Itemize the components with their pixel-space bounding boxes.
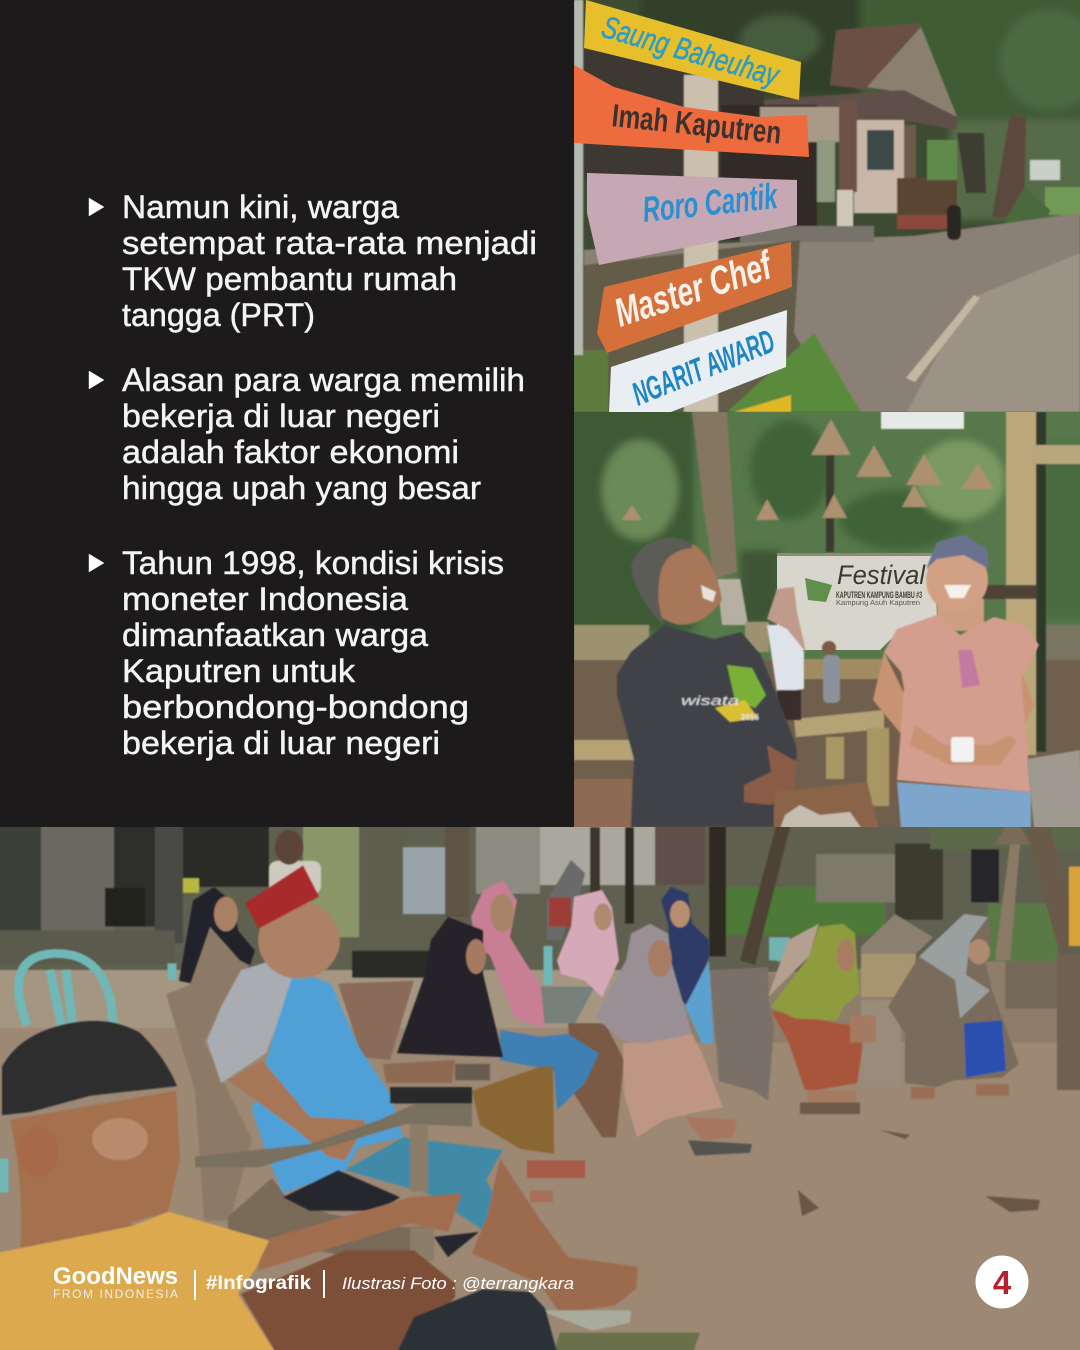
signboards: [574, 0, 809, 412]
shirt logo: wisata: [681, 693, 739, 708]
bullet 2: adalah faktor ekonomi: [122, 434, 459, 470]
woman: grey hijab with pink dress: [595, 924, 752, 1156]
wooden chairs: [166, 914, 1080, 1260]
sign: Ngarit Award: [609, 310, 787, 412]
woman: navy hijab holding phone: [661, 887, 714, 1044]
teal plastic chairs: [4, 941, 782, 1192]
sign: Saung Baheuhay: Saung Baheuhay: [598, 9, 785, 93]
trees and wall: [303, 808, 359, 937]
footer: hashtag: #Infografik: [206, 1273, 311, 1294]
footer: GoodNews logo: GoodNews: [53, 1263, 178, 1290]
photo: villagers seated outdoors: [0, 827, 1080, 1350]
background scene: [0, 808, 1080, 1350]
person: standing woman in background: [269, 830, 321, 894]
sign: Roro Cantik: [587, 173, 797, 265]
sign: Imah Kaputren: [574, 65, 809, 157]
bullet 3: dimanfaatkan warga: [122, 617, 428, 653]
bullet 1: Namun kini, warga: [122, 189, 399, 225]
person: smiling woman in pink blouse: [873, 535, 1039, 829]
photo: two women laughing at bamboo festival: [574, 412, 1080, 827]
ground debris: dry leaves: [798, 1130, 1040, 1216]
page number badge: 4: [993, 1264, 1012, 1301]
festival signboard: [777, 553, 937, 650]
sign: Imah Kaputren: Imah Kaputren: [610, 97, 783, 151]
foliage: [554, 392, 1080, 632]
woman: green hijab with batik skirt: [768, 924, 876, 1114]
bullet 1: [89, 189, 537, 333]
festival signboard: Festival: [837, 560, 926, 590]
bullet 3: Kaputren untuk: [122, 653, 356, 689]
bullet 1: TKW pembantu rumah: [122, 261, 457, 297]
road: [584, 213, 1080, 412]
man: foreground with black cap and yellow shirt: [0, 1021, 565, 1350]
man: red cap in blue shirt: [195, 866, 638, 1331]
footer: GoodNews logo: FROM INDONESIA: [53, 1287, 178, 1301]
crate and barrel: [774, 750, 1080, 829]
sign: Master Chef: Master Chef: [609, 243, 779, 336]
bullet 3: bekerja di luar negeri: [122, 725, 440, 761]
panel: dark text background: [0, 0, 574, 827]
page number badge: [976, 1256, 1028, 1308]
bullet 1: tangga (PRT): [122, 297, 315, 333]
woman: grey scarf with blue bag: [888, 914, 1019, 1099]
woman: black hijab at back left: [179, 887, 255, 994]
sign: Ngarit Award: NGARIT AWARD: [627, 322, 780, 412]
bullet 3: [89, 545, 504, 761]
bullet 3: berbondong-bondong: [122, 689, 469, 725]
festival signboard: KAPUTREN KAMPUNG BAMBU #3: [836, 590, 922, 600]
bullet 3: moneter Indonesia: [122, 581, 408, 617]
bullet 3: Tahun 1998, kondisi krisis: [122, 545, 504, 581]
sign: Master Chef: [597, 242, 792, 353]
person: woman and child in background: [767, 587, 840, 720]
house: [830, 23, 921, 90]
footer: photo credit: Ilustrasi Foto : @terrangkara: [342, 1274, 574, 1293]
person: laughing man in grey shirt: [617, 537, 797, 827]
woman: light pink hijab: [557, 890, 619, 997]
bamboo rails: [574, 740, 636, 760]
woman: black hijab with batik sarong: [397, 917, 585, 1202]
bullet 2: bekerja di luar negeri: [122, 398, 440, 434]
festival signboard: Kampung Asuh Kaputren: [836, 600, 920, 607]
woman: pink hijab with jeans: [471, 880, 599, 1110]
shirt logo: [681, 665, 766, 722]
footer: divider 2: [323, 1270, 325, 1298]
left building: [34, 808, 114, 930]
text block: bullet points: [89, 189, 537, 761]
footer: divider 1: [194, 1270, 196, 1300]
man standing behind light pink woman: [547, 860, 585, 940]
photo: signposts in Kaputren village: [574, 0, 1080, 412]
sign: Roro Cantik: Roro Cantik: [641, 175, 780, 230]
shirt logo: 2016: [741, 713, 759, 722]
bullet 2: Alasan para warga memilih: [122, 362, 525, 398]
hanging conical hats: [622, 419, 994, 520]
tractor: [897, 178, 957, 218]
bullet 2: [89, 362, 525, 506]
sign: Saung Baheuhay: [584, 0, 801, 100]
bullet 2: hingga upah yang besar: [122, 470, 481, 506]
bullet 1: setempat rata-rata menjadi: [122, 225, 537, 261]
fences and ground: [574, 625, 649, 663]
